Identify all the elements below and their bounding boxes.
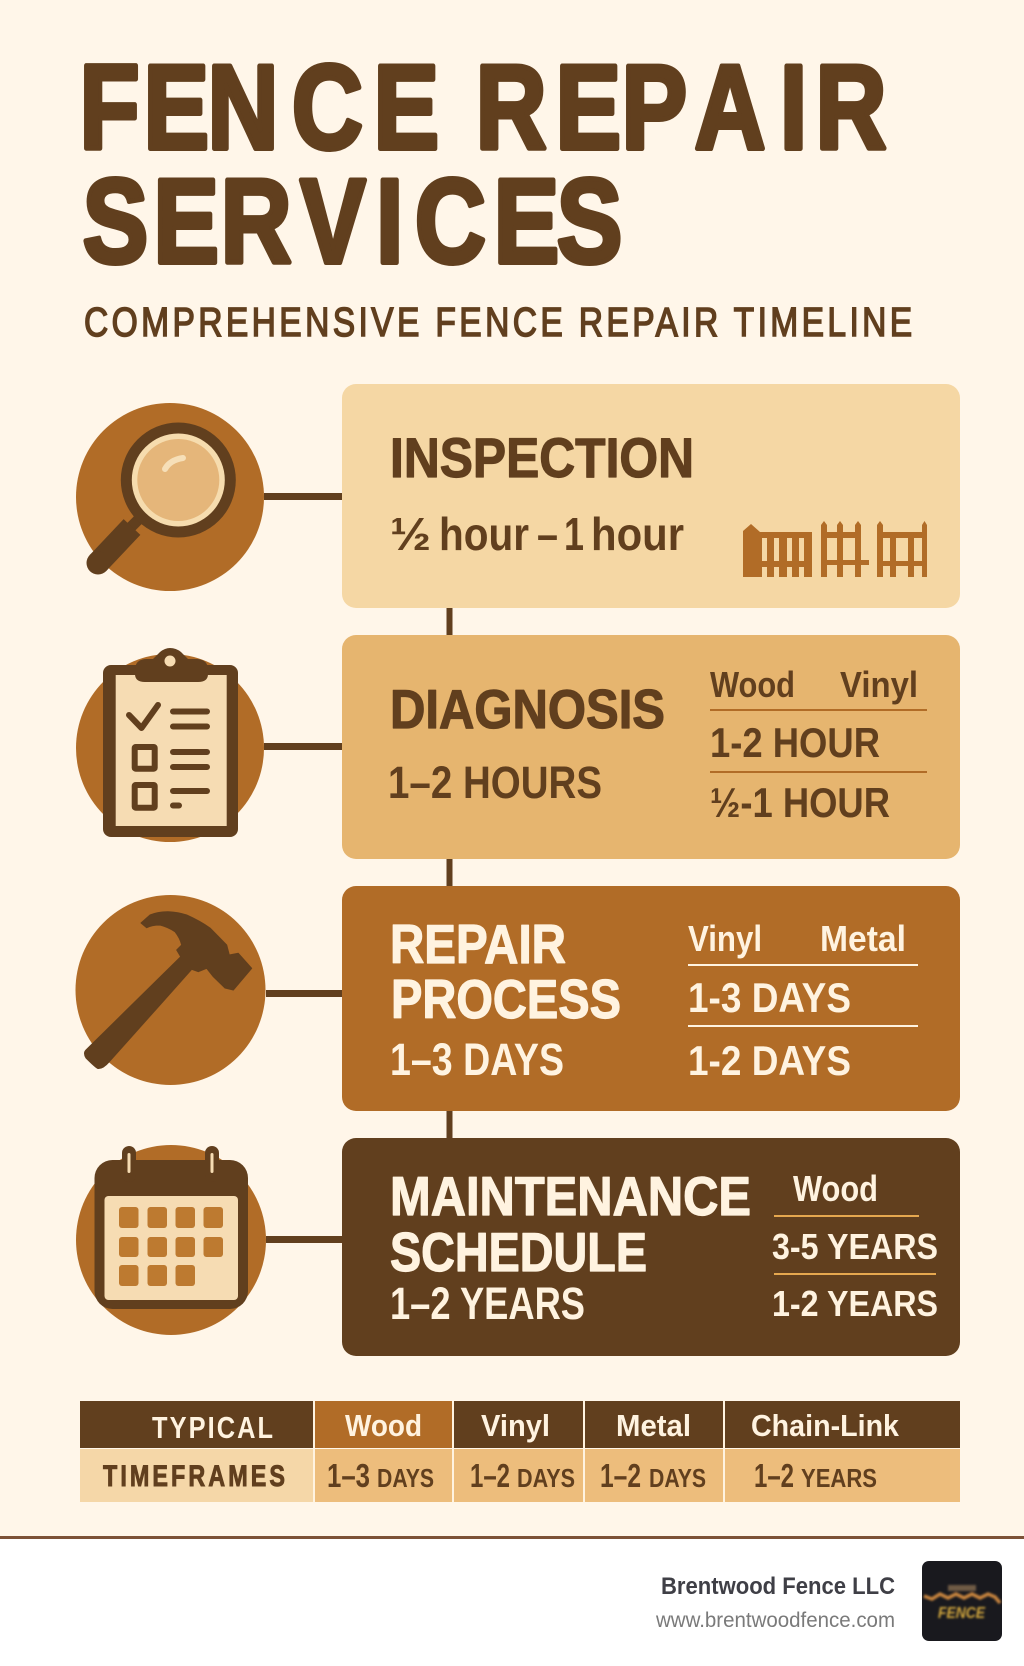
title: FENCE REPAIR [80,41,887,175]
icon: company logo: FENCE [938,1605,986,1622]
panel: maintenance schedule: 1-2 YEARS [772,1283,938,1324]
duration text: – [537,508,558,560]
table: typical timeframes: YEARS [801,1463,877,1493]
duration text: hour [439,508,529,560]
panel: diagnosis: ½-1 HOUR [710,779,890,826]
table: typical timeframes: DAYS [377,1463,434,1493]
timeline connectors [264,493,452,1243]
panel: diagnosis [342,635,960,859]
footer [0,1536,1024,1666]
duration text [390,508,684,560]
icon: fence styles [743,521,927,577]
footer: www.brentwoodfence.com [655,1609,895,1632]
duration text: hour [591,508,684,560]
table: typical timeframes: 1–2 [600,1457,641,1494]
table: typical timeframes: TYPICAL [152,1411,273,1446]
table: typical timeframes: TIMEFRAMES [103,1459,285,1493]
panel: diagnosis: 1–2 HOURS [388,757,602,808]
panel: diagnosis: 1-2 HOUR [710,719,880,766]
title [80,41,887,289]
duration text: ½ [390,508,431,560]
panel: repair process: PROCESS [391,968,621,1030]
title: SERVICES [83,155,622,289]
table: typical timeframes: Chain-Link [751,1408,900,1443]
icon: hammer [76,895,266,1085]
icon: clipboard checklist [76,648,264,842]
panel: maintenance schedule [342,1138,960,1356]
table: typical timeframes: 1–2 [470,1457,510,1494]
table: typical timeframes: DAYS [649,1463,706,1493]
panel: diagnosis: Vinyl [840,664,918,705]
footer: Brentwood Fence LLC [661,1573,895,1600]
panel: repair process: 1-3 DAYS [688,974,851,1021]
table: typical timeframes: Wood [345,1408,422,1443]
panel: maintenance schedule: 3-5 YEARS [772,1226,938,1267]
icon: magnifying glass [76,403,264,591]
panel: maintenance schedule: SCHEDULE [390,1221,647,1283]
panel: maintenance schedule: MAINTENANCE [390,1165,751,1227]
icon: calendar [76,1145,266,1335]
panel: repair process: Vinyl [688,918,762,959]
panel: repair process: 1-2 DAYS [688,1037,851,1084]
table: typical timeframes: Metal [616,1408,691,1443]
duration text: 1 [564,508,584,560]
panel: repair process: 1–3 DAYS [390,1034,564,1085]
table: typical timeframes: Vinyl [481,1408,550,1443]
table: typical timeframes: DAYS [517,1463,575,1493]
panel: inspection: INSPECTION [390,426,694,489]
panel: inspection [342,384,960,608]
panel: repair process: REPAIR [390,913,566,975]
panel: diagnosis: Wood [710,664,795,705]
panel: maintenance schedule: 1–2 YEARS [390,1278,585,1329]
panel: repair process [342,886,960,1111]
table: typical timeframes [80,1401,960,1502]
panel: maintenance schedule: Wood [793,1168,878,1209]
table: typical timeframes: 1–3 [327,1457,370,1494]
panel: repair process: Metal [820,918,906,959]
table: typical timeframes: 1–2 [754,1457,794,1494]
panel: diagnosis: DIAGNOSIS [390,678,665,740]
icon: company logo [922,1561,1002,1641]
subtitle: COMPREHENSIVE FENCE REPAIR TIMELINE [84,299,912,345]
